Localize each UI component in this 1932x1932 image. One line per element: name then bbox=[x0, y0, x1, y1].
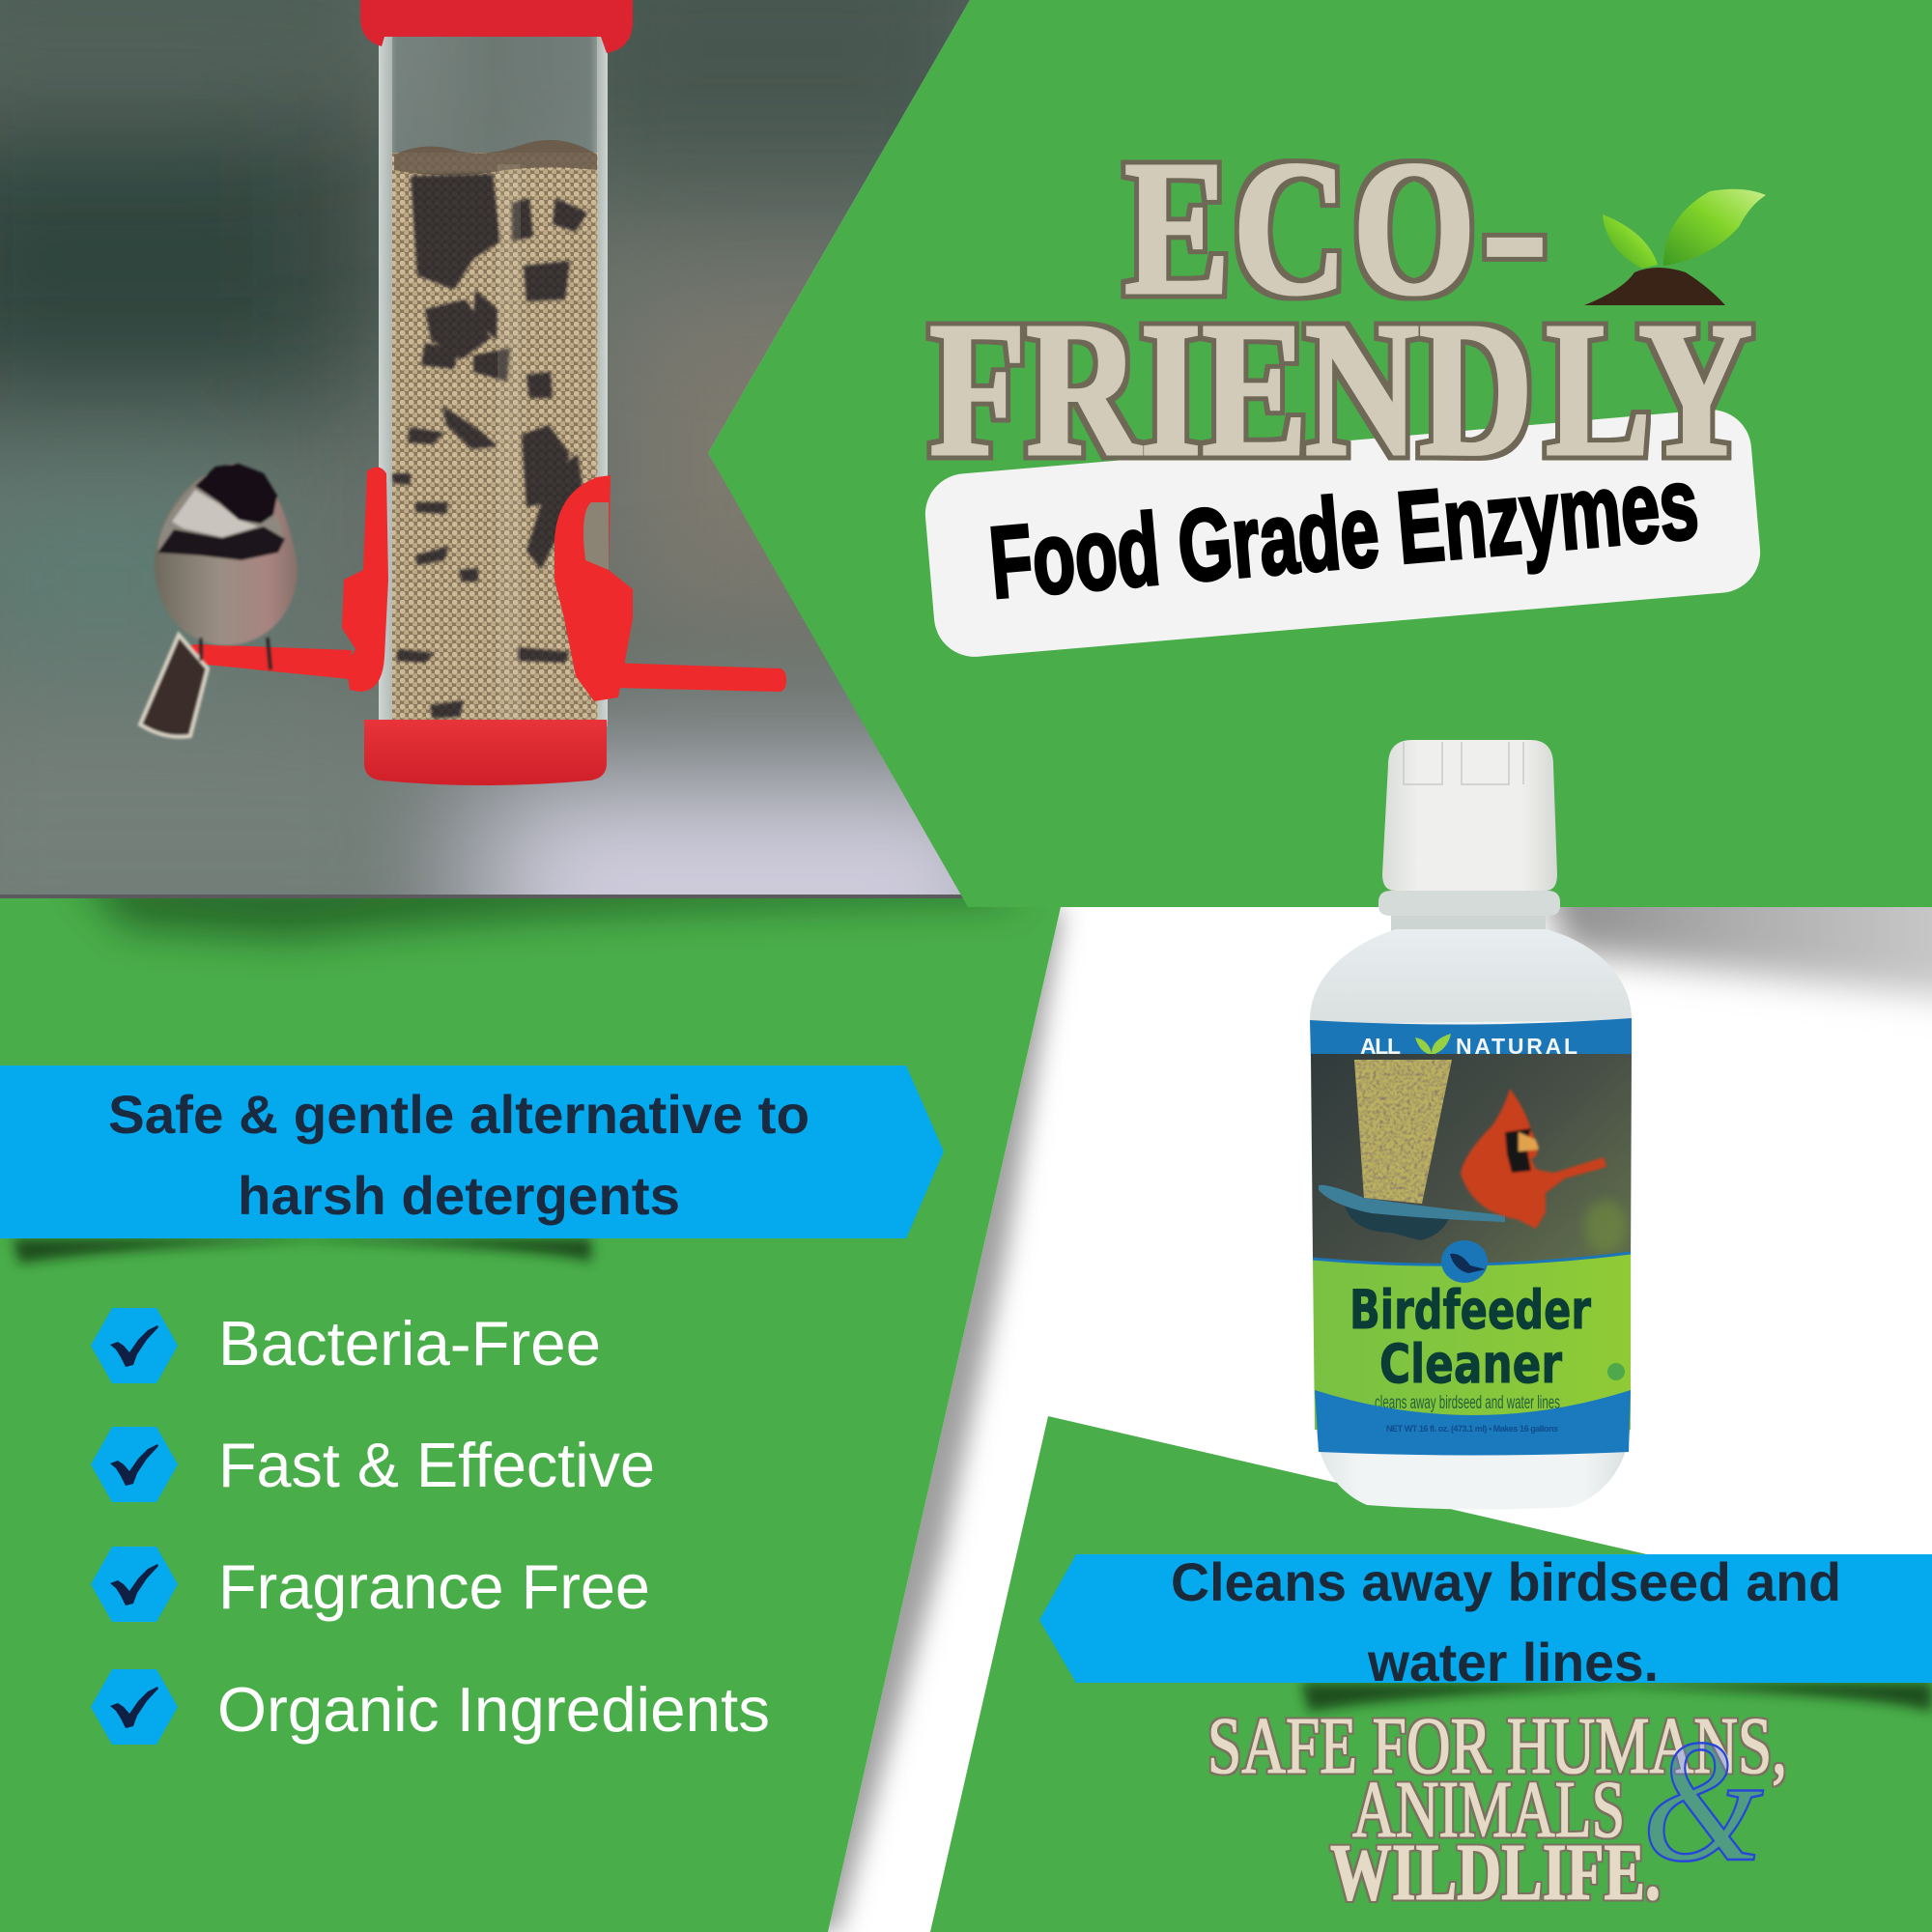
product: Birdfeeder Cleaner bottle bbox=[1304, 740, 1637, 1510]
icon: left feed port and perch bbox=[188, 467, 388, 692]
icon: feeder tray bbox=[1319, 1185, 1505, 1240]
heading: Safe for humans, animals and wildlife: WILDLIFE. bbox=[1330, 1828, 1661, 1918]
icon: right feed port and perch bbox=[554, 475, 786, 701]
label: top blue band: ALL bbox=[1360, 1034, 1401, 1059]
icon: script ampersand: & bbox=[1642, 1704, 1764, 1898]
panel: blue banner shadow right bbox=[1301, 1683, 1932, 1712]
bottle body bbox=[1310, 929, 1632, 1510]
heading: Eco-Friendly title: ECO bbox=[1124, 121, 1476, 335]
heading: Eco-Friendly title: - bbox=[1481, 121, 1548, 335]
panel: lower right green background bbox=[930, 1416, 1932, 1932]
label: green panel: Cleaner bbox=[1379, 1333, 1562, 1395]
heading: Safe for humans, animals and wildlife bbox=[1208, 1701, 1787, 1918]
label: top blue band bbox=[1310, 1018, 1632, 1059]
list: product benefits bbox=[91, 1308, 770, 1745]
panel: lower left shadow under the photo bbox=[77, 874, 1024, 939]
label: green panel: Birdfeeder bbox=[1350, 1279, 1591, 1341]
photo: chickadee on a red seed feeder bbox=[0, 0, 970, 898]
icon: cardinal bbox=[1461, 1089, 1606, 1229]
panel: blue banner alternative to harsh detergents: harsh detergents bbox=[238, 1165, 680, 1226]
list item: Bacteria-Free bbox=[91, 1308, 601, 1383]
panel: white wedge background shadows bbox=[773, 860, 1932, 1932]
icon: seed feeder bbox=[1354, 1060, 1452, 1204]
label: bottom blue band bbox=[1315, 1390, 1631, 1455]
icon: seedling sprout bbox=[1584, 189, 1766, 305]
list item: Organic Ingredients: Organic Ingredients bbox=[217, 1674, 770, 1745]
label: bottom blue band: NET WT 16 fl. oz. (473.1 ml) • Makes 16 gallons bbox=[1386, 1424, 1558, 1434]
panel: blue banner cleans away birdseed: water lines. bbox=[1367, 1632, 1659, 1692]
icon: feeder tube and seed bbox=[379, 35, 608, 726]
label: green panel: cleans away birdseed and water lines bbox=[1375, 1393, 1560, 1413]
icon: chickadee bbox=[140, 464, 298, 737]
icon: bottle cap bbox=[1378, 740, 1560, 931]
panel: blue banner cleans away birdseed: Cleans away birdseed and bbox=[1171, 1551, 1841, 1612]
icon: red feeder base bbox=[364, 720, 607, 785]
icon: bird logo bbox=[1441, 1240, 1488, 1283]
icon: red feeder top cap bbox=[360, 0, 633, 53]
panel: top right green background bbox=[708, 0, 1932, 907]
label: top blue band: NATURAL bbox=[1456, 1034, 1577, 1059]
panel: blue banner cleans away birdseed bbox=[1039, 1551, 1932, 1692]
list item: Fast and Effective: Fast & Effective bbox=[218, 1430, 655, 1500]
list item: Fragrance Free: Fragrance Free bbox=[218, 1551, 650, 1622]
panel: blue banner alternative to harsh detergents bbox=[0, 1065, 944, 1238]
panel: blue banner shadow left bbox=[13, 1238, 591, 1264]
panel: blue banner alternative to harsh detergents: Safe & gentle alternative to bbox=[108, 1084, 810, 1145]
callout: Food Grade Enzymes pill bbox=[922, 407, 1764, 660]
panel: lower left green background bbox=[0, 898, 1061, 1932]
label: green panel bbox=[1313, 1240, 1631, 1430]
label: feeder and cardinal picture bbox=[1304, 1054, 1637, 1271]
heading: Safe for humans, animals and wildlife: ANIMALS bbox=[1352, 1765, 1625, 1855]
heading: Eco-Friendly title: FRIENDLY bbox=[929, 282, 1752, 497]
heading: Eco-Friendly title bbox=[929, 121, 1752, 497]
list item: Bacteria-Free: Bacteria-Free bbox=[218, 1308, 601, 1378]
